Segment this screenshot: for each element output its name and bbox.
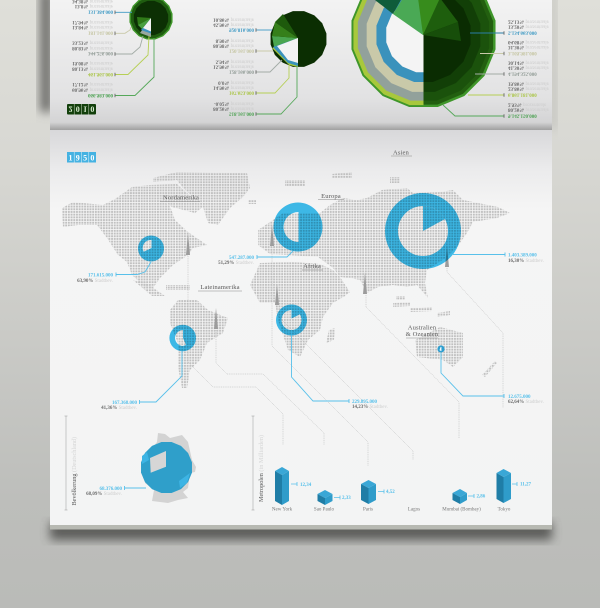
bar: New York: 12,34	[300, 483, 312, 488]
mirrored figures left: 60.96% prozentuale	[72, 86, 114, 91]
dashed connector lines	[188, 247, 503, 466]
continent statistics: 62,64% Stadtbev.	[508, 400, 544, 405]
mirrored figures middle: 920.816.000	[229, 26, 254, 31]
label: Lagos: Lagos	[408, 508, 420, 512]
small pie chart 2010 middle	[271, 11, 326, 67]
donut: Asien	[385, 193, 461, 269]
bar: New York	[272, 467, 312, 512]
mirrored figures left: 131.384.000	[88, 9, 114, 14]
mirrored figures middle: 167.653.000	[229, 89, 254, 94]
mirrored figures right: 3.169.981.000	[508, 50, 537, 55]
mirrored figures right: 25.13% prozentuale	[508, 18, 550, 24]
donut: Australien	[437, 345, 445, 353]
mirrored figures right: 30.14% prozentuale	[508, 60, 550, 64]
continent statistics: 1.403.389.000	[508, 253, 537, 258]
continent statistics: 12.675.000	[508, 395, 531, 400]
mirrored figures left: 13.8% prozentuale	[75, 3, 114, 8]
region labels	[160, 150, 439, 338]
page shadow	[40, 0, 556, 540]
large pie chart 2010 right	[351, 0, 496, 107]
mirrored figures middle: 14.96% prozentuale	[213, 84, 255, 89]
bar: Paris	[361, 480, 395, 512]
mirrored figures right: 64.68% prozentuale	[508, 39, 550, 44]
dotted world map	[62, 172, 510, 388]
continent statistics: 68.376.000	[100, 487, 122, 492]
small pie chart 2010 left	[129, 0, 173, 40]
region labels: Asien	[393, 150, 410, 156]
mirrored figures left	[72, 0, 114, 97]
bar: New York: New York	[272, 508, 293, 512]
bar: Mumbai: 2,86	[476, 494, 486, 500]
year badge 1950: 1950	[68, 153, 98, 162]
mirrored figures middle	[213, 16, 255, 115]
year badge 2010 mirrored: 2010	[68, 104, 98, 113]
donut: Nordamerika	[138, 236, 164, 262]
bar: Mumbai	[442, 489, 486, 512]
mirrored figures middle: 120.161.000	[229, 47, 254, 52]
region labels: Nordamerika	[163, 194, 199, 202]
mirrored figures right: 41.30% prozentuale	[508, 64, 550, 70]
continent statistics: 51,29% Stadtbev.	[218, 261, 254, 266]
mirrored figures middle: 5.94% prozentuale	[216, 58, 255, 63]
mirrored figures left: 344.256.000	[88, 50, 114, 55]
bar: Paris: 4,52	[386, 490, 395, 495]
mirrored figures middle: 0.0% prozentuale	[218, 79, 255, 84]
region labels: & Ozeanien	[406, 331, 439, 338]
mirrored figures middle: -0.02% prozentuale	[214, 100, 255, 105]
mirrored figures middle: 45.96% prozentuale	[213, 21, 255, 26]
mirrored figures right: 9.145.150.000	[508, 112, 537, 117]
mirrored figures middle: 10.86% prozentuale	[213, 16, 255, 21]
bar: Mumbai: Mumbai (Bombay)	[442, 508, 481, 512]
donut: Afrika	[276, 304, 307, 336]
mirrored figures left: 80.13% prozentuale	[72, 65, 114, 70]
bar: Paris: Paris	[363, 508, 373, 512]
mirrored figures right: 4.194.325.000	[508, 70, 537, 75]
mirrored figures middle: 128.166.000	[229, 68, 254, 73]
donut: Lateinamerika	[169, 325, 196, 351]
mirrored figures right: 2.93% prozentuale	[508, 102, 547, 106]
region labels: Australien	[408, 324, 437, 332]
axis: Bevölkerung and Metropolen: Bevölkerung (Deutschland)	[71, 437, 78, 506]
mirrored figures right: 13.20% prozentuale	[508, 24, 550, 28]
region labels: Europa	[321, 193, 341, 200]
bar: Sao Paulo: 2,33	[342, 496, 351, 501]
mirrored figures right: 5.134.663.000	[508, 29, 537, 34]
region labels: Lateinamerika	[200, 284, 240, 291]
continent statistics	[77, 253, 544, 497]
continent statistics: 41,36% Stadtbev.	[101, 406, 137, 411]
continent statistics: 167.368.000	[112, 401, 138, 406]
bar: Tokyo	[496, 469, 531, 512]
axis: Bevölkerung and Metropolen	[64, 416, 265, 510]
continent statistics: 14,23% Stadtbev.	[352, 405, 388, 410]
bar: Sao Paulo	[314, 490, 351, 512]
mirrored figures right: 80.26% prozentuale	[508, 106, 550, 112]
continent statistics: 63,90% Stadtbev.	[77, 279, 113, 284]
spires on map	[186, 224, 449, 329]
mirrored figures right: 31.30% prozentuale	[508, 44, 550, 49]
mirrored figures left: 461.961.000	[88, 71, 114, 76]
mirrored figures middle: 8.90% prozentuale	[216, 37, 255, 42]
continent statistics: 547.287.000	[229, 256, 254, 261]
continent statistics: 229.895.000	[352, 400, 378, 405]
region labels: Afrika	[303, 263, 321, 270]
mirrored figures middle: 80.26% prozentuale	[213, 105, 255, 110]
bar: Tokyo: 11,27	[520, 482, 531, 488]
mirrored figures left: 80.83% prozentuale	[72, 45, 114, 50]
continent statistics: 171.615.000	[88, 273, 114, 278]
leader lines upper page	[115, 10, 504, 118]
Germany map with population chart	[141, 433, 196, 503]
mirrored figures left: 17.94% prozentuale	[72, 19, 114, 24]
continent statistics: 68,09% Stadtbev.	[86, 492, 122, 497]
mirrored figures right: 19.86% prozentuale	[508, 80, 550, 86]
continent statistics: 16,30% Stadtbev.	[508, 259, 544, 264]
bar: Tokyo: Tokyo	[498, 508, 511, 512]
mirrored figures right: 6.861.181.000	[508, 91, 537, 96]
mirrored figures right: 23.86% prozentuale	[508, 86, 550, 90]
mirrored figures middle: 80.98% prozentuale	[213, 42, 255, 47]
mirrored figures left: 666.983.000	[88, 92, 114, 97]
mirrored figures right	[508, 18, 550, 117]
mirrored figures left: 181.141.000	[88, 30, 114, 35]
axis: Bevölkerung and Metropolen: Metropolen (in Milliarden)	[258, 435, 265, 502]
panel: 1950 world map page	[50, 130, 552, 530]
mirrored figures middle: 518.161.000	[229, 110, 254, 115]
mirrored figures left: 13.84% prozentuale	[72, 24, 114, 29]
mirrored figures left: 33.23% prozentuale	[72, 39, 114, 44]
blue leader lines	[116, 251, 505, 490]
mirrored figures middle: 15.96% prozentuale	[213, 63, 255, 68]
donut: Europa	[274, 202, 322, 251]
mirrored figures left: 17.12% prozentuale	[72, 81, 114, 86]
mirrored figures left: 19.08% prozentuale	[72, 60, 114, 65]
panel: upper mirrored page	[50, 0, 552, 130]
bar: Sao Paulo: Sao Paulo	[314, 508, 335, 512]
